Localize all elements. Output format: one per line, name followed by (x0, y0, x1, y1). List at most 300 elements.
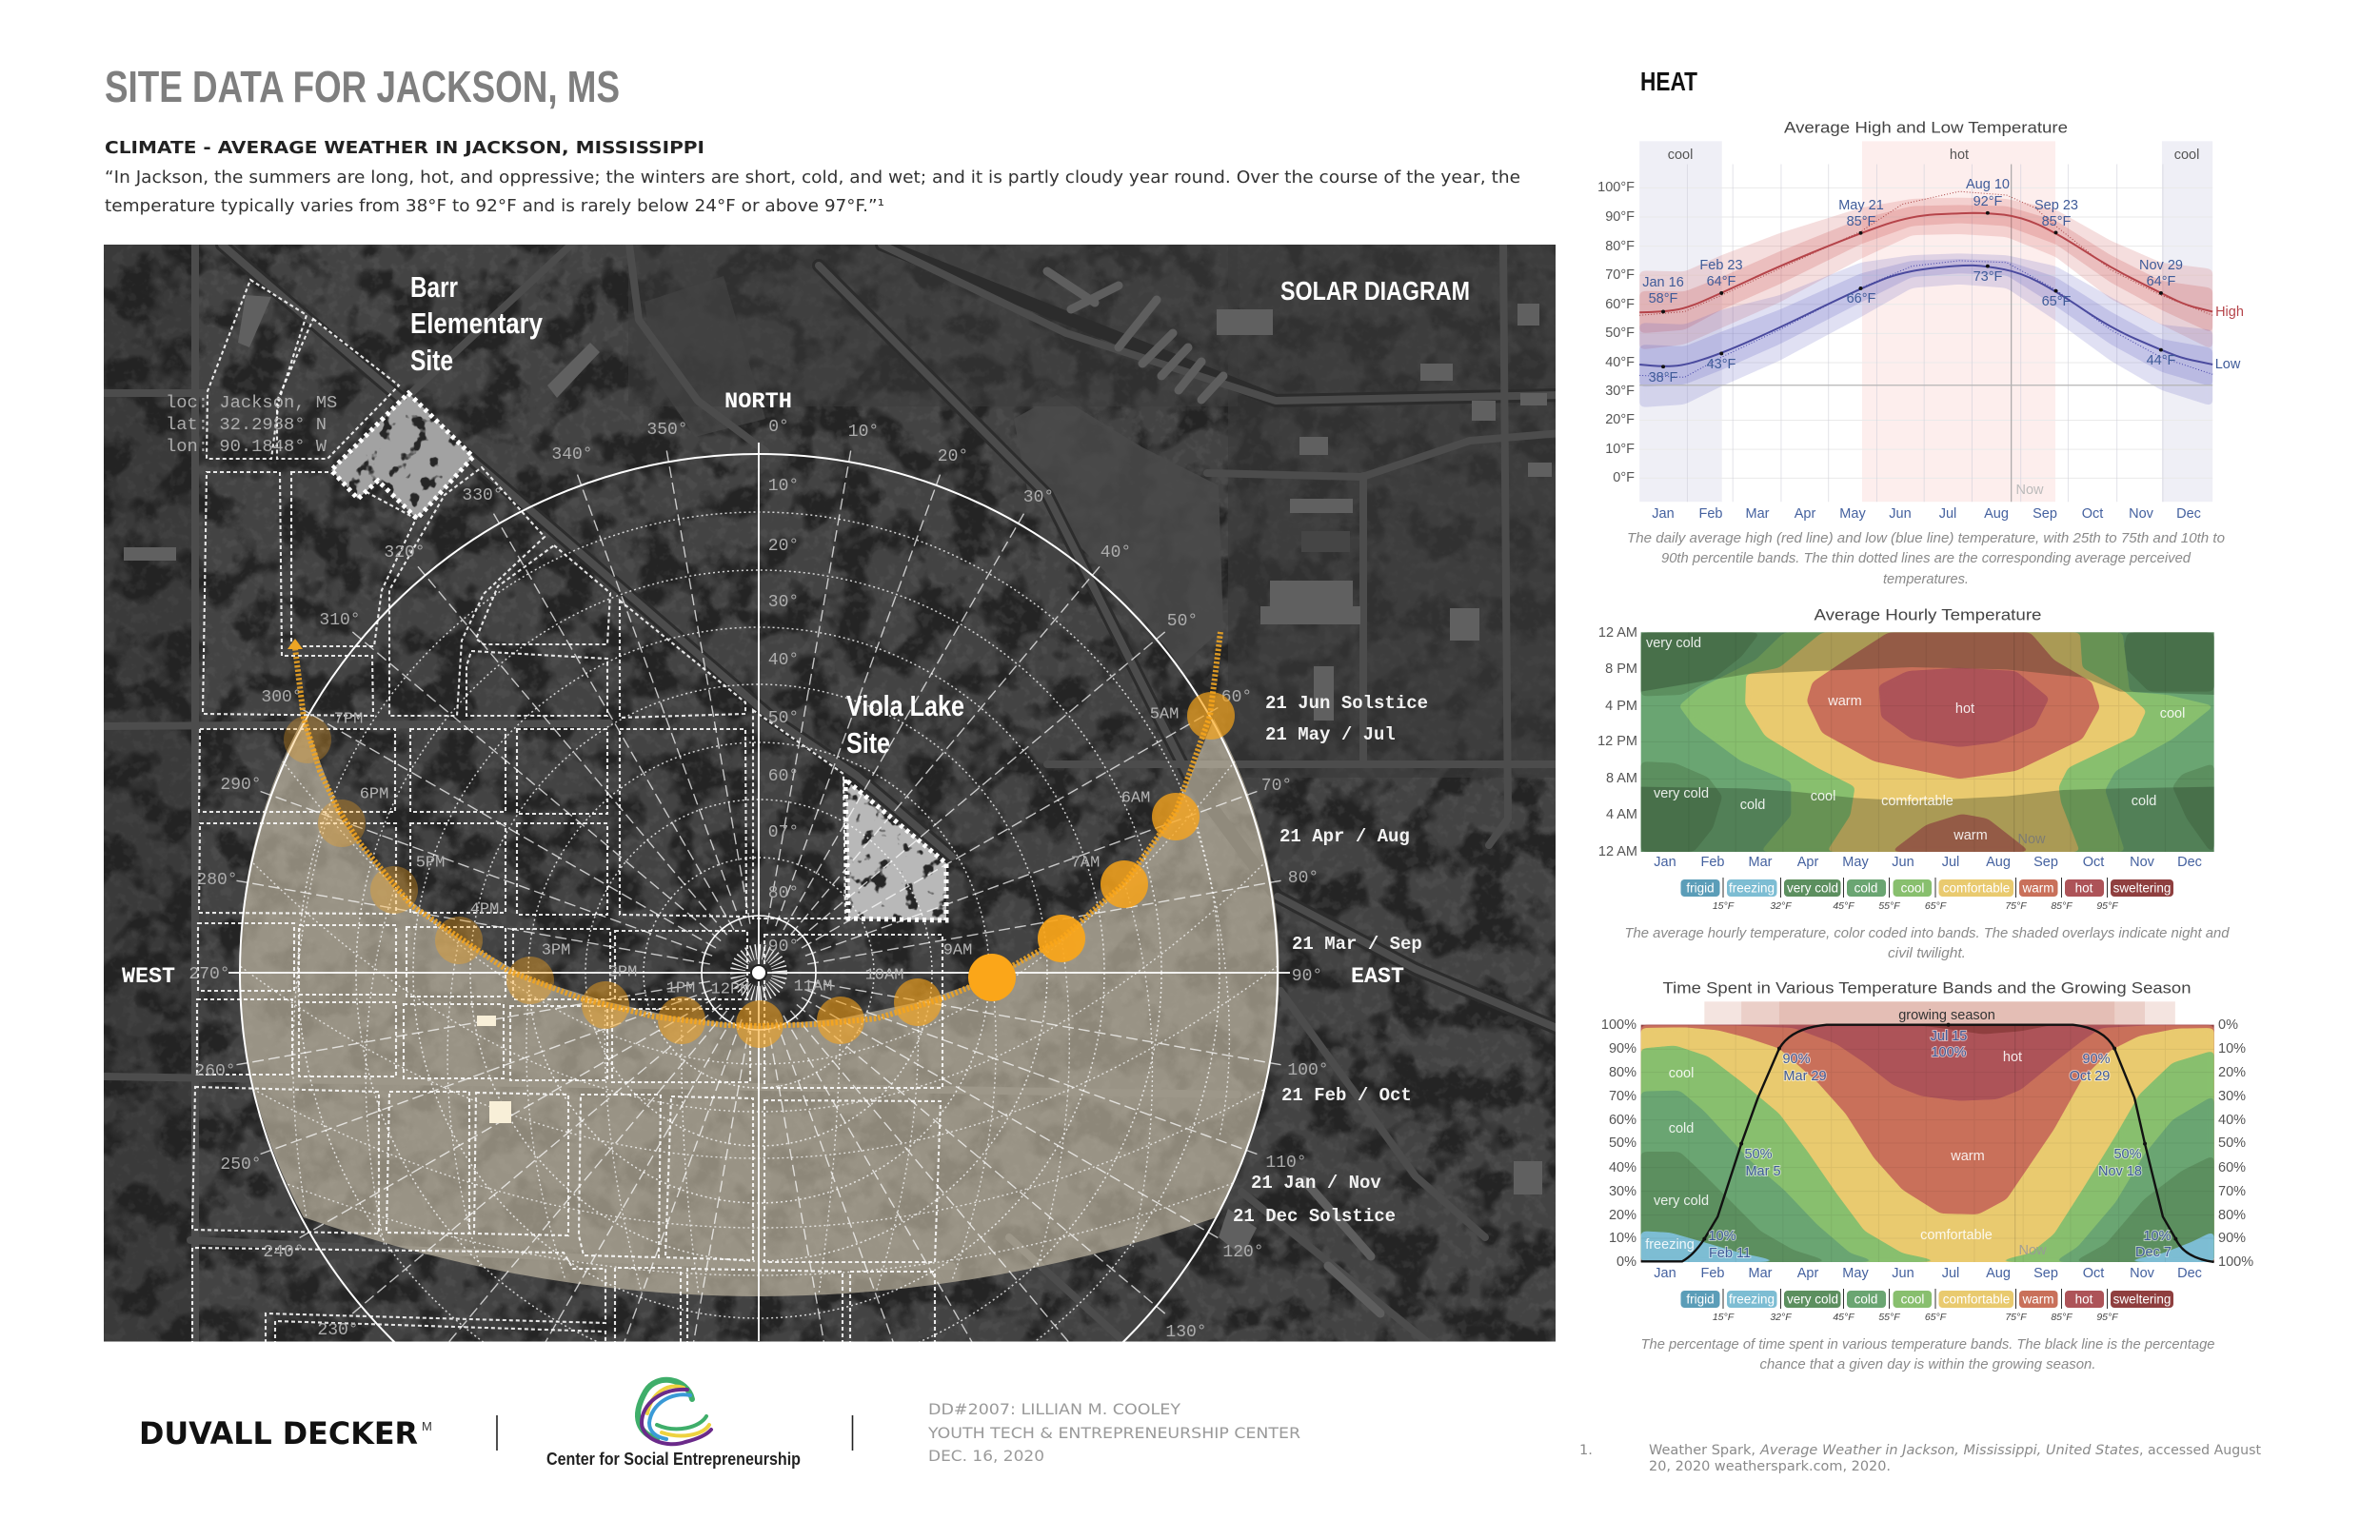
seasons and annotations: 85°F (2042, 214, 2072, 229)
left percent axis: 50% (1609, 1135, 1636, 1151)
month labels: Jan (1654, 1266, 1676, 1281)
temperature band legend: 15°F (1713, 1312, 1735, 1323)
altitude degree labels: 07° (768, 823, 799, 842)
seasons and annotations: 43°F (1707, 357, 1736, 372)
site label: Viola Lake Site: Viola Lake (846, 689, 964, 722)
azimuth degree labels: 80° (1288, 869, 1319, 888)
hour labels: 7PM (334, 710, 363, 729)
month labels: Apr (1797, 1266, 1818, 1281)
right percent axis: 70% (2218, 1184, 2246, 1199)
temperature band legend: 55°F (1878, 1312, 1900, 1323)
right percent axis: 20% (2218, 1065, 2246, 1080)
right percent axis: 60% (2218, 1160, 2246, 1175)
hour labels (334, 706, 1179, 999)
project credits text (927, 1400, 1300, 1465)
right percent axis: 90% (2218, 1231, 2246, 1246)
month labels: Feb (1698, 506, 1723, 522)
shaded sun exposure zone (240, 718, 1279, 1296)
band labels: cool (1669, 1066, 1694, 1081)
hour labels: 11AM (794, 978, 832, 996)
seasons and annotations: 64°F (1707, 274, 1736, 289)
azimuth degree labels: 290° (220, 776, 262, 795)
y axis hour labels: 12 AM (1598, 625, 1637, 641)
seasons and annotations: 64°F (2147, 274, 2176, 289)
band labels: very cold (1654, 1194, 1709, 1209)
right percent axis: 80% (2218, 1208, 2246, 1223)
temperature band legend: hot (2075, 1293, 2093, 1306)
y axis labels: 40°F (1605, 355, 1635, 370)
climate quote paragraph: temperature typically varies from 38°F to 92°F and is rarely below 24°F or above 97°F.”¹ (105, 196, 884, 216)
azimuth degree labels: 310° (319, 611, 361, 630)
temperature band legend: cool (1901, 1293, 1924, 1306)
polar sun chart grid (228, 443, 1290, 1342)
section heading: climate: CLIMATE - AVERAGE WEATHER IN JACKSON, MISSISSIPPI (105, 139, 704, 158)
temperature band legend: 65°F (1925, 1312, 1947, 1323)
azimuth degree labels: 40° (1101, 543, 1131, 563)
hour labels: 5AM (1150, 706, 1179, 723)
heading: heat: HEAT (1640, 67, 1697, 96)
month labels: Nov (2129, 506, 2154, 522)
azimuth degree labels: 130° (1165, 1323, 1207, 1342)
month labels (1652, 506, 2201, 522)
site label: Barr Elementary Site: Site (410, 344, 453, 377)
month labels: Sep (2033, 855, 2058, 870)
temperature band legend: freezing (1729, 881, 1775, 895)
right percent axis: 40% (2218, 1113, 2246, 1128)
month labels (1654, 1266, 2202, 1281)
solar date labels (1233, 693, 1428, 1227)
growing season annotations: Nov 18 (2098, 1164, 2142, 1179)
chart title: Average Hourly Temperature (1815, 605, 2041, 624)
month labels (1654, 855, 2202, 870)
compass directions (122, 389, 1404, 989)
azimuth degree labels: 110° (1265, 1154, 1307, 1173)
band labels: warm (1953, 828, 1988, 843)
growing season annotations: 50% (2113, 1147, 2142, 1162)
chart caption (1641, 1337, 2214, 1372)
band labels: comfortable (1881, 794, 1954, 809)
azimuth degree labels: 350° (646, 421, 688, 440)
project credits text: YOUTH TECH & ENTREPRENEURSHIP CENTER (927, 1424, 1300, 1442)
month labels: Nov (2130, 855, 2155, 870)
azimuth degree labels: 330° (462, 486, 504, 505)
band labels: cold (1669, 1121, 1694, 1136)
month labels: May (1842, 1266, 1869, 1281)
stacked band plot (1641, 1001, 2214, 1262)
chart title: Time Spent in Various Temperature Bands and the Growing Season (1662, 978, 2192, 997)
temperature band legend: 65°F (1925, 900, 1947, 912)
azimuth degree labels: 280° (196, 871, 238, 890)
chart caption: The percentage of time spent in various temperature bands. The black line is the percentage (1641, 1337, 2214, 1352)
temperature band legend: sweltering (2113, 881, 2171, 895)
temperature band legend: 15°F (1713, 900, 1735, 912)
panel: solar diagram over aerial map (104, 245, 1556, 1342)
right percent axis: 50% (2218, 1135, 2246, 1151)
left percent axis: 40% (1609, 1160, 1636, 1175)
month labels: Jan (1652, 506, 1675, 522)
month labels: Jul (1939, 506, 1956, 522)
sun path dotted line (288, 632, 1220, 1026)
y axis labels: 0°F (1613, 470, 1635, 485)
month labels: Jan (1654, 855, 1676, 870)
month labels: Aug (1986, 1266, 2011, 1281)
azimuth degree labels: 240° (263, 1243, 305, 1262)
growing season annotations: Feb 11 (1709, 1246, 1751, 1261)
altitude degree labels: 30° (768, 593, 799, 612)
panel label: solar diagram: SOLAR DIAGRAM (1280, 276, 1470, 306)
solar date labels: 21 Jan / Nov (1251, 1173, 1381, 1194)
azimuth degree labels: 90° (1292, 967, 1322, 986)
small cream markers (477, 1016, 511, 1123)
left percent axis: 20% (1609, 1208, 1636, 1223)
temperature band legend: very cold (1787, 1293, 1838, 1306)
azimuth degree labels: 320° (384, 543, 426, 563)
hour labels: 12PM (711, 980, 749, 999)
temperature band legend: very cold (1787, 881, 1838, 895)
hour labels: 6AM (1121, 790, 1150, 807)
seasons and annotations: Feb 23 (1699, 258, 1743, 273)
hour labels: 10AM (865, 967, 903, 984)
y axis labels: 20°F (1605, 412, 1635, 427)
temperature band legend: 85°F (2051, 1312, 2073, 1323)
azimuth degree labels: 300° (261, 688, 303, 707)
band labels: comfortable (1920, 1228, 1993, 1243)
logo: Center for Social Entrepreneurship: Center for Social Entrepreneurship (546, 1450, 801, 1469)
azimuth degree labels (188, 418, 1329, 1342)
solar date labels: 21 Feb / Oct (1281, 1085, 1412, 1106)
band labels: warm (1827, 694, 1862, 709)
climate quote paragraph: “In Jackson, the summers are long, hot, and oppressive; the winters are short, cold, and wet; and it is partly cloudy year round. Over the course of the year, the (105, 168, 1520, 188)
solar date labels: 21 Apr / Aug (1279, 826, 1410, 847)
month labels: Dec (2177, 1266, 2202, 1281)
y axis hour labels: 4 AM (1606, 807, 1637, 822)
temperature band legend (1681, 1289, 2173, 1323)
altitude degree labels (769, 478, 796, 951)
project credits text: DD#2007: LILLIAN M. COOLEY (928, 1400, 1180, 1418)
chart title: Average High and Low Temperature (1784, 118, 2068, 137)
growing season annotations: Oct 29 (2070, 1069, 2110, 1084)
chart: time spent in temperature bands and growing season (1601, 978, 2253, 1372)
band labels: cold (2132, 794, 2156, 809)
y axis labels: 50°F (1605, 326, 1635, 341)
solar date labels: 21 Mar / Sep (1292, 934, 1422, 955)
hour labels: 9AM (943, 942, 972, 959)
title: SITE DATA FOR JACKSON, MS (105, 62, 620, 111)
left percent axis: 60% (1609, 1113, 1636, 1128)
y axis labels: 100°F (1597, 180, 1635, 195)
hour labels: 5PM (416, 855, 445, 872)
growing season annotations: 10% (2143, 1229, 2172, 1244)
seasons and annotations: 73°F (1973, 269, 2003, 285)
hour labels: 2PM (608, 963, 637, 982)
compass directions: EAST (1351, 964, 1404, 989)
azimuth degree labels: 60° (1221, 688, 1252, 707)
compass directions: WEST (122, 964, 175, 989)
month labels: Apr (1797, 855, 1818, 870)
right percent axis: 0% (2218, 1017, 2238, 1033)
y axis hour labels: 8 AM (1606, 771, 1637, 786)
logo: Duvall Decker: M (422, 1419, 432, 1433)
seasons and annotations: High (2215, 305, 2244, 320)
altitude degree labels: 10° (768, 477, 799, 496)
month labels: Jun (1889, 506, 1912, 522)
seasons and annotations: May 21 (1838, 198, 1884, 213)
footnote: 1. (1579, 1443, 1593, 1458)
month labels: Sep (2033, 506, 2057, 522)
seasons and annotations: Nov 29 (2139, 258, 2183, 273)
seasons and annotations: 92°F (1973, 194, 2003, 209)
seasons and annotations: 66°F (1847, 291, 1876, 306)
seasons and annotations: 65°F (2042, 294, 2072, 309)
solar date labels: 21 Jun Solstice (1265, 693, 1428, 714)
temperature band legend: 85°F (2051, 900, 2073, 912)
solar date labels: 21 May / Jul (1265, 724, 1396, 745)
temperature band legend: 32°F (1770, 900, 1792, 912)
hour labels: 4PM (470, 900, 499, 919)
logo: Duvall Decker: DUVALL DECKER (139, 1415, 418, 1451)
azimuth degree labels: 250° (220, 1155, 262, 1175)
y axis hour labels (1597, 625, 1637, 859)
azimuth degree labels: 340° (551, 445, 593, 464)
y axis hour labels: 12 PM (1597, 734, 1637, 749)
chart caption: chance that a given day is within the growing season. (1759, 1357, 2096, 1372)
seasons and annotations: cool (1668, 148, 1693, 163)
temperature band legend: sweltering (2113, 1293, 2171, 1306)
temperature band legend: 75°F (2005, 900, 2027, 912)
month labels: Jul (1942, 855, 1959, 870)
band labels (1646, 636, 2185, 847)
azimuth degree labels: 230° (317, 1321, 359, 1340)
azimuth degree labels: 270° (188, 965, 230, 984)
site label: Viola Lake Site: Site (846, 726, 890, 760)
location text: lon: 90.1848° W (166, 436, 327, 457)
y axis labels: 80°F (1605, 239, 1635, 254)
climate quote paragraph (105, 168, 1520, 216)
band labels: freezing (1645, 1237, 1695, 1253)
y axis labels: 70°F (1605, 267, 1635, 283)
project credits text: DEC. 16, 2020 (928, 1447, 1044, 1465)
band labels: cool (1811, 789, 1835, 804)
footnote: , accessed August (2139, 1443, 2261, 1458)
site outline: Barr Elementary (331, 390, 474, 520)
month labels: May (1842, 855, 1869, 870)
temperature plot (1639, 141, 2212, 502)
chart caption: The average hourly temperature, color coded into bands. The shaded overlays indicate night and (1624, 926, 2230, 941)
site label: Barr Elementary Site (410, 270, 544, 377)
seasons and annotations: Jan 16 (1642, 275, 1684, 290)
temperature band legend: 32°F (1770, 1312, 1792, 1323)
hour labels: 7AM (1071, 855, 1100, 872)
temperature band legend: 75°F (2005, 1312, 2027, 1323)
sun position markers (284, 692, 1235, 1048)
temperature band legend: cold (1854, 881, 1877, 895)
month labels: May (1839, 506, 1866, 522)
left percent axis: 100% (1601, 1017, 1636, 1033)
month labels: Apr (1795, 506, 1815, 522)
temperature band legend: cold (1854, 1293, 1877, 1306)
band labels (1645, 1008, 2047, 1258)
left percent axis (1601, 1017, 1636, 1270)
azimuth degree labels: 30° (1023, 488, 1054, 507)
right percent axis: 10% (2218, 1041, 2246, 1056)
site outline: Viola Lake (843, 779, 948, 923)
seasons and annotations: 38°F (1649, 370, 1678, 385)
band labels: hot (1955, 701, 1974, 717)
month labels: Feb (1700, 1266, 1725, 1281)
seasons and annotations: 58°F (1649, 291, 1678, 306)
chart caption: 90th percentile bands. The thin dotted lines are the corresponding average perceived (1661, 551, 2192, 566)
azimuth degree labels: 0° (768, 418, 789, 437)
growing season annotations: Mar 29 (1783, 1069, 1827, 1084)
temperature band legend: frigid (1686, 881, 1715, 895)
y axis labels: 30°F (1605, 384, 1635, 399)
left percent axis: 90% (1609, 1041, 1636, 1056)
azimuth degree labels: 50° (1167, 612, 1198, 631)
y axis labels (1597, 180, 1635, 485)
azimuth degree labels: 100° (1287, 1061, 1329, 1080)
temperature band legend: 45°F (1833, 900, 1854, 912)
y axis hour labels: 12 AM (1598, 844, 1637, 859)
left percent axis: 10% (1609, 1231, 1636, 1246)
chart caption: temperatures. (1883, 572, 1969, 587)
growing season annotations: 10% (1708, 1229, 1736, 1244)
month labels: Dec (2177, 855, 2202, 870)
temperature band legend: 55°F (1878, 900, 1900, 912)
seasons and annotations: Low (2215, 357, 2241, 372)
month labels: Jun (1892, 1266, 1914, 1281)
band labels: growing season (1898, 1008, 1995, 1023)
month labels: Sep (2033, 1266, 2058, 1281)
month labels: Jul (1942, 1266, 1959, 1281)
site label: Barr Elementary Site: Elementary (410, 306, 544, 340)
chart caption (1627, 531, 2225, 587)
azimuth degree labels: 70° (1261, 777, 1292, 796)
band labels: very cold (1646, 636, 1701, 651)
month labels: Mar (1749, 1266, 1773, 1281)
band labels: Now (2017, 832, 2046, 847)
band labels: hot (2003, 1050, 2022, 1065)
divider (496, 1415, 498, 1451)
y axis labels: 60°F (1605, 297, 1635, 312)
month labels: Feb (1700, 855, 1725, 870)
azimuth degree labels: 10° (848, 423, 879, 442)
seasons and annotations: hot (1950, 148, 1969, 163)
hour labels: 1PM (666, 980, 695, 997)
aerial photo background (104, 245, 1561, 1342)
seasons and annotations: 44°F (2147, 353, 2176, 368)
temperature band legend: 95°F (2096, 1312, 2118, 1323)
temperature band legend (1681, 878, 2173, 912)
month labels: Aug (1986, 855, 2011, 870)
y axis hour labels: 4 PM (1605, 699, 1637, 714)
site label: Barr Elementary Site: Barr (410, 270, 458, 304)
footnote (1579, 1443, 2261, 1474)
azimuth degree labels: 260° (194, 1062, 236, 1081)
left percent axis: 80% (1609, 1065, 1636, 1080)
altitude degree labels: 40° (768, 651, 799, 670)
chart caption (1624, 926, 2230, 961)
seasons and annotations: Sep 23 (2034, 198, 2078, 213)
altitude degree labels: 80° (768, 884, 799, 903)
footnote: Average Weather in Jackson, Mississippi, United States (1759, 1443, 2139, 1458)
temperature band legend: frigid (1686, 1293, 1715, 1306)
seasons and annotations (1642, 148, 2244, 498)
month labels: Aug (1984, 506, 2009, 522)
temperature band legend: warm (2022, 1293, 2054, 1306)
altitude degree labels: 20° (768, 537, 799, 556)
location text (166, 392, 337, 457)
band labels: very cold (1654, 786, 1709, 801)
hour labels: 3PM (542, 942, 570, 959)
right percent axis (2218, 1017, 2253, 1270)
temperature band legend: comfortable (1943, 1293, 2010, 1306)
right percent axis: 30% (2218, 1089, 2246, 1104)
left percent axis: 70% (1609, 1089, 1636, 1104)
month labels: Nov (2130, 1266, 2155, 1281)
month labels: Mar (1746, 506, 1770, 522)
location text: lat: 32.2988° N (166, 414, 327, 435)
band labels: warm (1950, 1149, 1985, 1164)
temperature band legend: comfortable (1943, 881, 2010, 895)
month labels: Jun (1892, 855, 1914, 870)
left percent axis: 0% (1616, 1254, 1636, 1270)
location text: loc: Jackson, MS (166, 392, 337, 413)
right percent axis: 100% (2218, 1254, 2253, 1270)
temperature band legend: 45°F (1833, 1312, 1854, 1323)
growing season annotations: 50% (1744, 1147, 1773, 1162)
month labels: Oct (2082, 506, 2103, 522)
altitude degree labels: 90° (768, 938, 799, 957)
site block outlines (192, 280, 942, 1352)
altitude degree labels: 60° (768, 767, 799, 786)
growing season annotations: Dec 7 (2135, 1245, 2172, 1260)
compass directions: NORTH (724, 389, 792, 414)
seasons and annotations: Aug 10 (1966, 177, 2010, 192)
temperature band legend: 95°F (2096, 900, 2118, 912)
footnote: 20, 2020 weatherspark.com, 2020. (1649, 1459, 1891, 1474)
month labels: Dec (2176, 506, 2201, 522)
icon: C swoosh (638, 1380, 711, 1444)
logo: Center for Social Entrepreneurship (546, 1380, 801, 1469)
month labels: Oct (2083, 1266, 2104, 1281)
temperature band legend: hot (2075, 881, 2093, 895)
seasons and annotations: Now (2015, 483, 2044, 498)
azimuth degree labels: 120° (1222, 1243, 1264, 1262)
band labels: cold (1740, 798, 1765, 813)
seasons and annotations: 85°F (1847, 214, 1876, 229)
chart: average high and low temperature (1597, 118, 2244, 587)
footnote: Weather Spark, (1649, 1443, 1755, 1458)
altitude degree labels: 50° (768, 709, 799, 728)
growing season annotations: Mar 5 (1745, 1164, 1781, 1179)
temperature band legend: cool (1901, 881, 1924, 895)
left percent axis: 30% (1609, 1184, 1636, 1199)
hourly heat map (1641, 632, 2214, 852)
growing season annotations: Jul 15 (1931, 1029, 1967, 1044)
seasons and annotations: cool (2174, 148, 2199, 163)
band labels: Now (2018, 1243, 2047, 1258)
chart caption: The daily average high (red line) and low (blue line) temperature, with 25th to 75th and 10th to (1627, 531, 2225, 546)
chart: average hourly temperature (1597, 605, 2230, 961)
site label: Viola Lake Site (846, 695, 963, 754)
month labels: Oct (2083, 855, 2104, 870)
temperature band legend: freezing (1729, 1293, 1775, 1306)
growing season annotations: 90% (1782, 1052, 1811, 1067)
growing season annotations: 90% (2082, 1052, 2111, 1067)
y axis labels: 90°F (1605, 209, 1635, 225)
y axis hour labels: 8 PM (1605, 661, 1637, 677)
divider (851, 1415, 853, 1451)
